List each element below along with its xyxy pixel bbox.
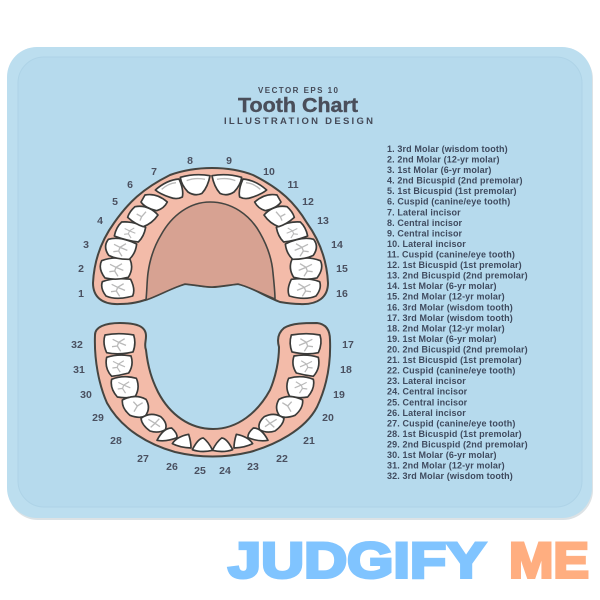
lower right teeth (212, 334, 321, 452)
tooth 26 (172, 434, 191, 448)
main title: Tooth Chart (238, 94, 358, 117)
tooth 28 (141, 414, 166, 432)
tooth 8 (180, 175, 210, 195)
tooth 11 (255, 195, 281, 211)
legend list: 20. 2nd Bicuspid (2nd premolar) (387, 344, 528, 354)
upper gum (93, 168, 328, 304)
tooth 25 (192, 438, 213, 452)
tooth position numbers: 2 (78, 263, 84, 275)
legend list: 16. 3rd Molar (wisdom tooth) (387, 302, 513, 312)
tooth position numbers: 7 (151, 166, 157, 178)
tooth position numbers: 14 (331, 239, 343, 251)
tooth position numbers: 32 (71, 339, 83, 351)
lower jaw diagram (95, 323, 330, 456)
legend list: 3. 1st Molar (6-yr molar) (387, 165, 492, 175)
legend list: 2. 2nd Molar (12-yr molar) (387, 154, 500, 164)
tooth position numbers: 4 (97, 215, 103, 227)
legend list: 21. 1st Bicuspid (1st premolar) (387, 355, 522, 365)
tooth 24 (212, 438, 233, 452)
tooth 18 (293, 355, 319, 376)
watermark word: ME: ME (509, 532, 589, 588)
tooth position numbers: 21 (303, 435, 315, 447)
tooth 5 (128, 206, 158, 227)
legend list: 28. 1st Bicuspid (1st premolar) (387, 429, 522, 439)
palate (146, 202, 275, 300)
legend list: 15. 2nd Molar (12-yr molar) (387, 292, 505, 302)
tooth 17 (290, 334, 321, 354)
tooth 32 (104, 334, 135, 354)
legend list: 31. 2nd Molar (12-yr molar) (387, 461, 505, 471)
tooth position numbers: 12 (302, 196, 314, 208)
legend list: 1. 3rd Molar (wisdom tooth) (387, 144, 508, 154)
tooth position numbers: 6 (127, 179, 133, 191)
tooth 4 (114, 222, 146, 242)
tooth position numbers: 1 (78, 288, 84, 300)
watermark word: JUDGIFY: JUDGIFY (228, 532, 486, 588)
legend list: 29. 2nd Bicuspid (2nd premolar) (387, 440, 528, 450)
tooth 7 (155, 179, 183, 199)
tooth 14 (285, 238, 316, 259)
legend list: 18. 2nd Molar (12-yr molar) (387, 323, 505, 333)
legend list: 13. 2nd Bicuspid (2nd premolar) (387, 271, 528, 281)
tooth 21 (259, 414, 284, 432)
legend list: 30. 1st Molar (6-yr molar) (387, 450, 497, 460)
tooth position numbers: 24 (219, 465, 231, 477)
legend list: 9. Central incisor (387, 228, 463, 238)
kicker: VECTOR EPS 10 (258, 86, 339, 95)
tooth 30 (111, 377, 138, 398)
panel: mat (7, 47, 593, 520)
tooth position numbers: 8 (187, 155, 193, 167)
tooth position numbers: 28 (110, 435, 122, 447)
tooth 29 (122, 396, 148, 417)
tooth 12 (264, 206, 294, 227)
tooth 13 (276, 222, 308, 242)
tooth position numbers: 9 (226, 155, 232, 167)
legend list: 8. Central incisor (387, 218, 463, 228)
subtitle: ILLUSTRATION DESIGN (224, 116, 373, 127)
tooth position numbers: 5 (112, 196, 118, 208)
tooth position numbers: 18 (340, 364, 352, 376)
legend list: 10. Lateral incisor (387, 239, 466, 249)
tooth 20 (277, 396, 303, 417)
tooth 27 (157, 428, 177, 441)
tooth position numbers: 23 (247, 461, 259, 473)
tooth 16 (288, 279, 320, 298)
tooth position numbers: 20 (322, 412, 334, 424)
tooth 19 (287, 377, 314, 398)
legend list: 11. Cuspid (canine/eye tooth) (387, 250, 515, 260)
tooth 23 (234, 434, 253, 448)
tooth position numbers: 17 (342, 339, 354, 351)
legend list: 5. 1st Bicuspid (1st premolar) (387, 186, 517, 196)
legend list: 19. 1st Molar (6-yr molar) (387, 334, 497, 344)
tooth 15 (290, 258, 322, 279)
tooth position numbers: 26 (166, 461, 178, 473)
tooth position numbers: 11 (287, 179, 299, 191)
legend list: 12. 1st Bicuspid (1st premolar) (387, 260, 522, 270)
tooth position numbers: 13 (317, 215, 329, 227)
legend list: 4. 2nd Bicuspid (2nd premolar) (387, 176, 523, 186)
tooth position numbers: 19 (333, 389, 345, 401)
watermark (228, 532, 589, 588)
legend list: 32. 3rd Molar (wisdom tooth) (387, 471, 513, 481)
legend list (387, 144, 528, 481)
legend list: 7. Lateral incisor (387, 207, 461, 217)
tooth 3 (106, 238, 137, 259)
legend list: 23. Lateral incisor (387, 376, 466, 386)
tooth position numbers: 16 (336, 288, 348, 300)
tooth 31 (106, 355, 132, 376)
tooth 1 (102, 279, 134, 298)
legend list: 22. Cuspid (canine/eye tooth) (387, 366, 516, 376)
tooth position numbers: 30 (80, 389, 92, 401)
upper left teeth (100, 175, 210, 298)
upper jaw diagram (93, 168, 328, 304)
lower left teeth (104, 334, 213, 452)
legend list: 6. Cuspid (canine/eye tooth) (387, 197, 510, 207)
tooth 10 (239, 179, 267, 199)
tooth position numbers: 31 (73, 364, 85, 376)
legend list: 25. Central incisor (387, 397, 468, 407)
tooth position numbers: 27 (137, 453, 149, 465)
tooth position numbers: 25 (194, 465, 206, 477)
lower gum (95, 323, 330, 456)
legend list: 27. Cuspid (canine/eye tooth) (387, 418, 516, 428)
legend list: 26. Lateral incisor (387, 408, 466, 418)
tooth position numbers: 10 (263, 166, 275, 178)
title block (224, 86, 373, 127)
tooth 9 (212, 175, 242, 195)
legend list: 14. 1st Molar (6-yr molar) (387, 281, 497, 291)
tooth 2 (100, 258, 132, 279)
legend list: 24. Central incisor (387, 387, 468, 397)
tooth position numbers: 15 (336, 263, 348, 275)
tooth position numbers: 29 (92, 412, 104, 424)
legend list: 17. 3rd Molar (wisdom tooth) (387, 313, 513, 323)
upper right teeth (212, 175, 322, 298)
tooth position numbers: 3 (83, 239, 89, 251)
tooth position numbers: 22 (276, 453, 288, 465)
tooth 6 (141, 195, 167, 211)
tooth position numbers (71, 155, 354, 477)
tooth 22 (248, 428, 268, 441)
